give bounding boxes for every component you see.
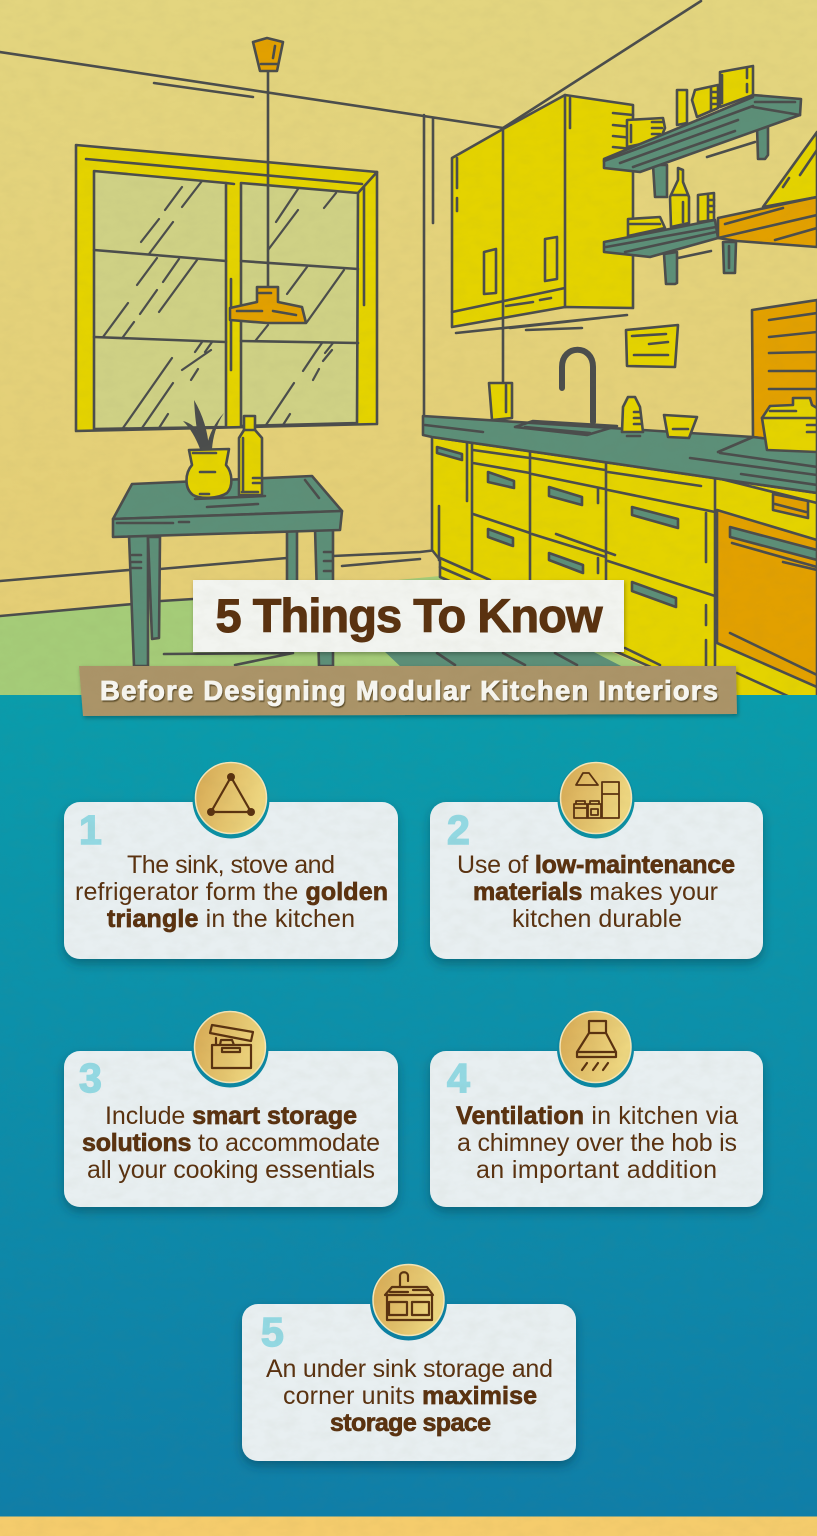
number 1: 1 (79, 807, 102, 853)
icon: under sink unit (370, 1264, 447, 1340)
icon: golden triangle (192, 762, 270, 838)
ceiling and wall lines (0, 1, 701, 665)
window (76, 145, 377, 431)
text block 1: triangle in the kitchen (107, 905, 355, 933)
text block 2: kitchen durable (512, 905, 682, 933)
icon: chimney hood (557, 1010, 634, 1088)
note card (626, 325, 678, 367)
drawer handles (437, 447, 817, 607)
faucet (562, 350, 593, 422)
hood (718, 132, 817, 247)
number 4: 4 (447, 1055, 470, 1101)
bottom strip (0, 1516, 817, 1536)
text block 3: all your cooking essentials (87, 1156, 375, 1184)
title text: 5 Things To Know (216, 589, 603, 642)
kitchen illustration (0, 1, 817, 700)
text block 4: Ventilation in kitchen via (456, 1102, 738, 1130)
text block 5: An under sink storage and (266, 1355, 553, 1383)
panel: tip 4 (430, 1010, 763, 1207)
floor shadow strip (383, 650, 625, 668)
floor (0, 576, 720, 700)
number 2: 2 (447, 807, 470, 853)
bottle on table (239, 416, 262, 495)
dish soap bottle (622, 397, 643, 436)
base cabinets (432, 437, 817, 700)
subtitle text: Before Designing Modular Kitchen Interiors (100, 675, 718, 706)
text block 1: refrigerator form the golden (75, 878, 388, 906)
number 5: 5 (261, 1309, 284, 1355)
blue lower background (0, 695, 817, 1517)
countertop (423, 416, 817, 493)
text block 2: materials makes your (473, 878, 718, 906)
window right pane (241, 183, 358, 426)
cabinet handles (484, 237, 557, 294)
text block 1: The sink, stove and (127, 851, 335, 879)
panel: tip 3 (64, 1010, 398, 1207)
cooking pot (762, 398, 817, 452)
text block 5: storage space (330, 1409, 491, 1437)
table (113, 476, 342, 666)
subtitle banner (79, 666, 737, 716)
bowl (664, 415, 697, 438)
number 3: 3 (79, 1055, 102, 1101)
lower shelf with jars (604, 168, 736, 284)
background wall (0, 0, 817, 700)
title box (193, 580, 624, 652)
oven door (717, 510, 817, 687)
text block 5 (266, 1355, 553, 1437)
icon: kitchen appliances (558, 762, 634, 838)
text block 4: a chimney over the hob is (457, 1129, 737, 1157)
text block 3: Include smart storage (105, 1102, 357, 1130)
cup (489, 383, 512, 420)
text block 3: solutions to accommodate (82, 1129, 380, 1157)
panel: tip 2 (430, 762, 763, 959)
text block 4 (456, 1102, 738, 1184)
text block 2: Use of low-maintenance (457, 851, 735, 879)
text block 1 (75, 851, 388, 933)
text block 3 (82, 1102, 380, 1184)
upper cabinets (452, 95, 633, 383)
orange wall panel (752, 300, 817, 445)
panel: tip 5 (242, 1264, 576, 1461)
text block 5: corner units maximise (283, 1382, 537, 1410)
window left pane (94, 171, 226, 429)
pendant lamp (230, 38, 306, 323)
text block 4: an important addition (476, 1156, 717, 1184)
panel: tip 1 (64, 762, 398, 959)
text block 2 (457, 851, 735, 933)
plant in vase (183, 400, 231, 498)
icon: storage box (192, 1010, 268, 1088)
upper shelf with jars (604, 66, 801, 197)
